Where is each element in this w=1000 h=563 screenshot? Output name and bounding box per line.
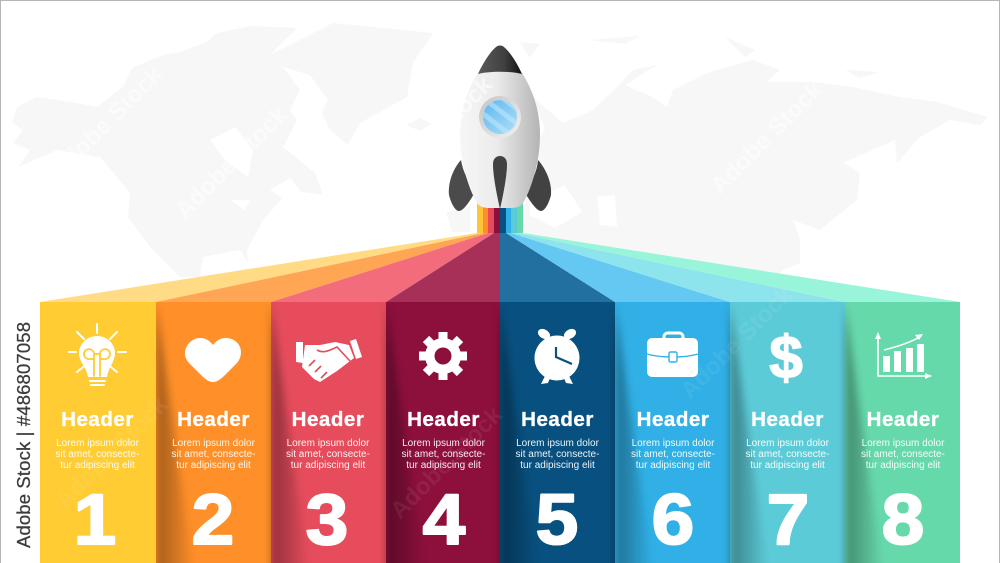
stock watermarks: Adobe Stock	[840, 121, 963, 244]
ray 4	[386, 233, 500, 302]
panel 4	[386, 302, 500, 563]
world map background	[12, 23, 988, 285]
map: Arctic islands	[446, 36, 880, 232]
stock watermarks: Adobe Stock	[705, 76, 828, 199]
text block 5: Header	[521, 408, 594, 431]
map: North America	[12, 26, 323, 277]
text block 7: tur adipiscing elit	[750, 460, 825, 471]
map: inland seas	[210, 127, 617, 228]
icon: gear	[419, 332, 467, 380]
map: Iceland	[406, 118, 432, 131]
stock watermarks: Adobe Stock	[385, 401, 508, 524]
text block 6: sit amet, consecte-	[631, 449, 715, 460]
text block 4: Header	[407, 408, 480, 431]
text block 2: sit amet, consecte-	[172, 449, 255, 460]
rocket centre fin	[493, 156, 507, 209]
rocket left fin	[449, 160, 476, 211]
ray 6	[506, 233, 730, 302]
text block 3: tur adipiscing elit	[291, 460, 365, 471]
map: Eurasia and Africa	[525, 60, 988, 285]
stock watermarks	[45, 61, 963, 524]
ray 3	[271, 233, 494, 302]
text block 1: tur adipiscing elit	[60, 460, 135, 471]
text block 3: Lorem ipsum dolor	[287, 438, 370, 449]
stock watermarks: Adobe Stock	[50, 391, 173, 514]
column panels	[40, 302, 960, 563]
stock watermarks: Adobe Stock	[375, 71, 498, 194]
text block 6: 6	[652, 480, 694, 559]
stock watermarks: Adobe Stock	[170, 101, 293, 224]
text block 3: sit amet, consecte-	[286, 449, 370, 460]
text block 8: tur adipiscing elit	[866, 460, 940, 471]
text block 8: sit amet, consecte-	[861, 449, 945, 460]
text block 4: 4	[423, 480, 465, 559]
text block 4: Lorem ipsum dolor	[402, 438, 486, 449]
ray 1	[40, 233, 483, 302]
text block 2: Header	[177, 408, 250, 431]
text block 2: Lorem ipsum dolor	[172, 438, 256, 449]
text block 6	[631, 408, 715, 559]
icon: light bulb	[69, 324, 126, 385]
text block 6: Lorem ipsum dolor	[632, 438, 715, 449]
map: Greenland	[270, 23, 433, 145]
text block 6: tur adipiscing elit	[636, 460, 710, 471]
text block 4	[402, 408, 486, 559]
icon: handshake	[296, 339, 362, 382]
text block 1: 1	[74, 480, 116, 559]
icon: briefcase	[647, 333, 698, 377]
fan rays	[40, 233, 960, 302]
icon: heart	[185, 338, 241, 382]
panel 3	[271, 302, 386, 563]
text block 1	[56, 408, 140, 559]
ray 8	[517, 233, 960, 302]
panel 1	[40, 302, 156, 563]
ray 2	[156, 233, 488, 302]
text block 8: Header	[867, 408, 939, 431]
ray 5	[500, 233, 615, 302]
rocket nose	[478, 46, 522, 74]
stock watermarks: Adobe Stock	[675, 281, 798, 404]
text block 2: tur adipiscing elit	[176, 460, 251, 471]
text block 1: Lorem ipsum dolor	[56, 438, 140, 449]
text block 3: 3	[306, 480, 348, 559]
icon: dollar sign: $	[769, 324, 803, 391]
panel 2	[156, 302, 271, 563]
rocket body	[460, 72, 540, 208]
text block 8: 8	[882, 480, 924, 559]
text block 7: 7	[767, 480, 809, 559]
panel 6	[615, 302, 730, 563]
text block 5: 5	[536, 480, 578, 559]
rocket	[449, 46, 551, 211]
text block 2	[172, 408, 256, 559]
text block 4: tur adipiscing elit	[406, 460, 481, 471]
rocket right fin	[524, 160, 551, 211]
rocket window	[479, 96, 521, 137]
text block 1: Header	[61, 408, 134, 431]
text block 3	[286, 408, 370, 559]
text block 6: Header	[637, 408, 709, 431]
panel 8	[845, 302, 960, 563]
text block 2: 2	[192, 480, 234, 559]
icon: growth chart	[875, 332, 932, 379]
text block 1: sit amet, consecte-	[56, 449, 139, 460]
rocket exhaust stripes	[477, 195, 523, 233]
column shadows	[156, 309, 880, 563]
text block 8	[861, 408, 945, 559]
stock id vertical label: Adobe Stock | #486807058	[13, 322, 34, 548]
text block 8: Lorem ipsum dolor	[862, 438, 945, 449]
text block 7: Lorem ipsum dolor	[746, 438, 830, 449]
text block 7: Header	[751, 408, 824, 431]
text block 7	[746, 408, 830, 559]
text block 4: sit amet, consecte-	[402, 449, 485, 460]
text block 3: Header	[292, 408, 364, 431]
text block 7: sit amet, consecte-	[746, 449, 829, 460]
text block 5: sit amet, consecte-	[516, 449, 599, 460]
icon: alarm clock	[534, 327, 580, 384]
text block 5: Lorem ipsum dolor	[516, 438, 600, 449]
text block 5	[516, 408, 600, 559]
panel 7	[730, 302, 845, 563]
stock watermarks: Adobe Stock	[45, 61, 168, 184]
ray 7	[511, 233, 845, 302]
panel 5	[500, 302, 615, 563]
text block 5: tur adipiscing elit	[520, 460, 595, 471]
